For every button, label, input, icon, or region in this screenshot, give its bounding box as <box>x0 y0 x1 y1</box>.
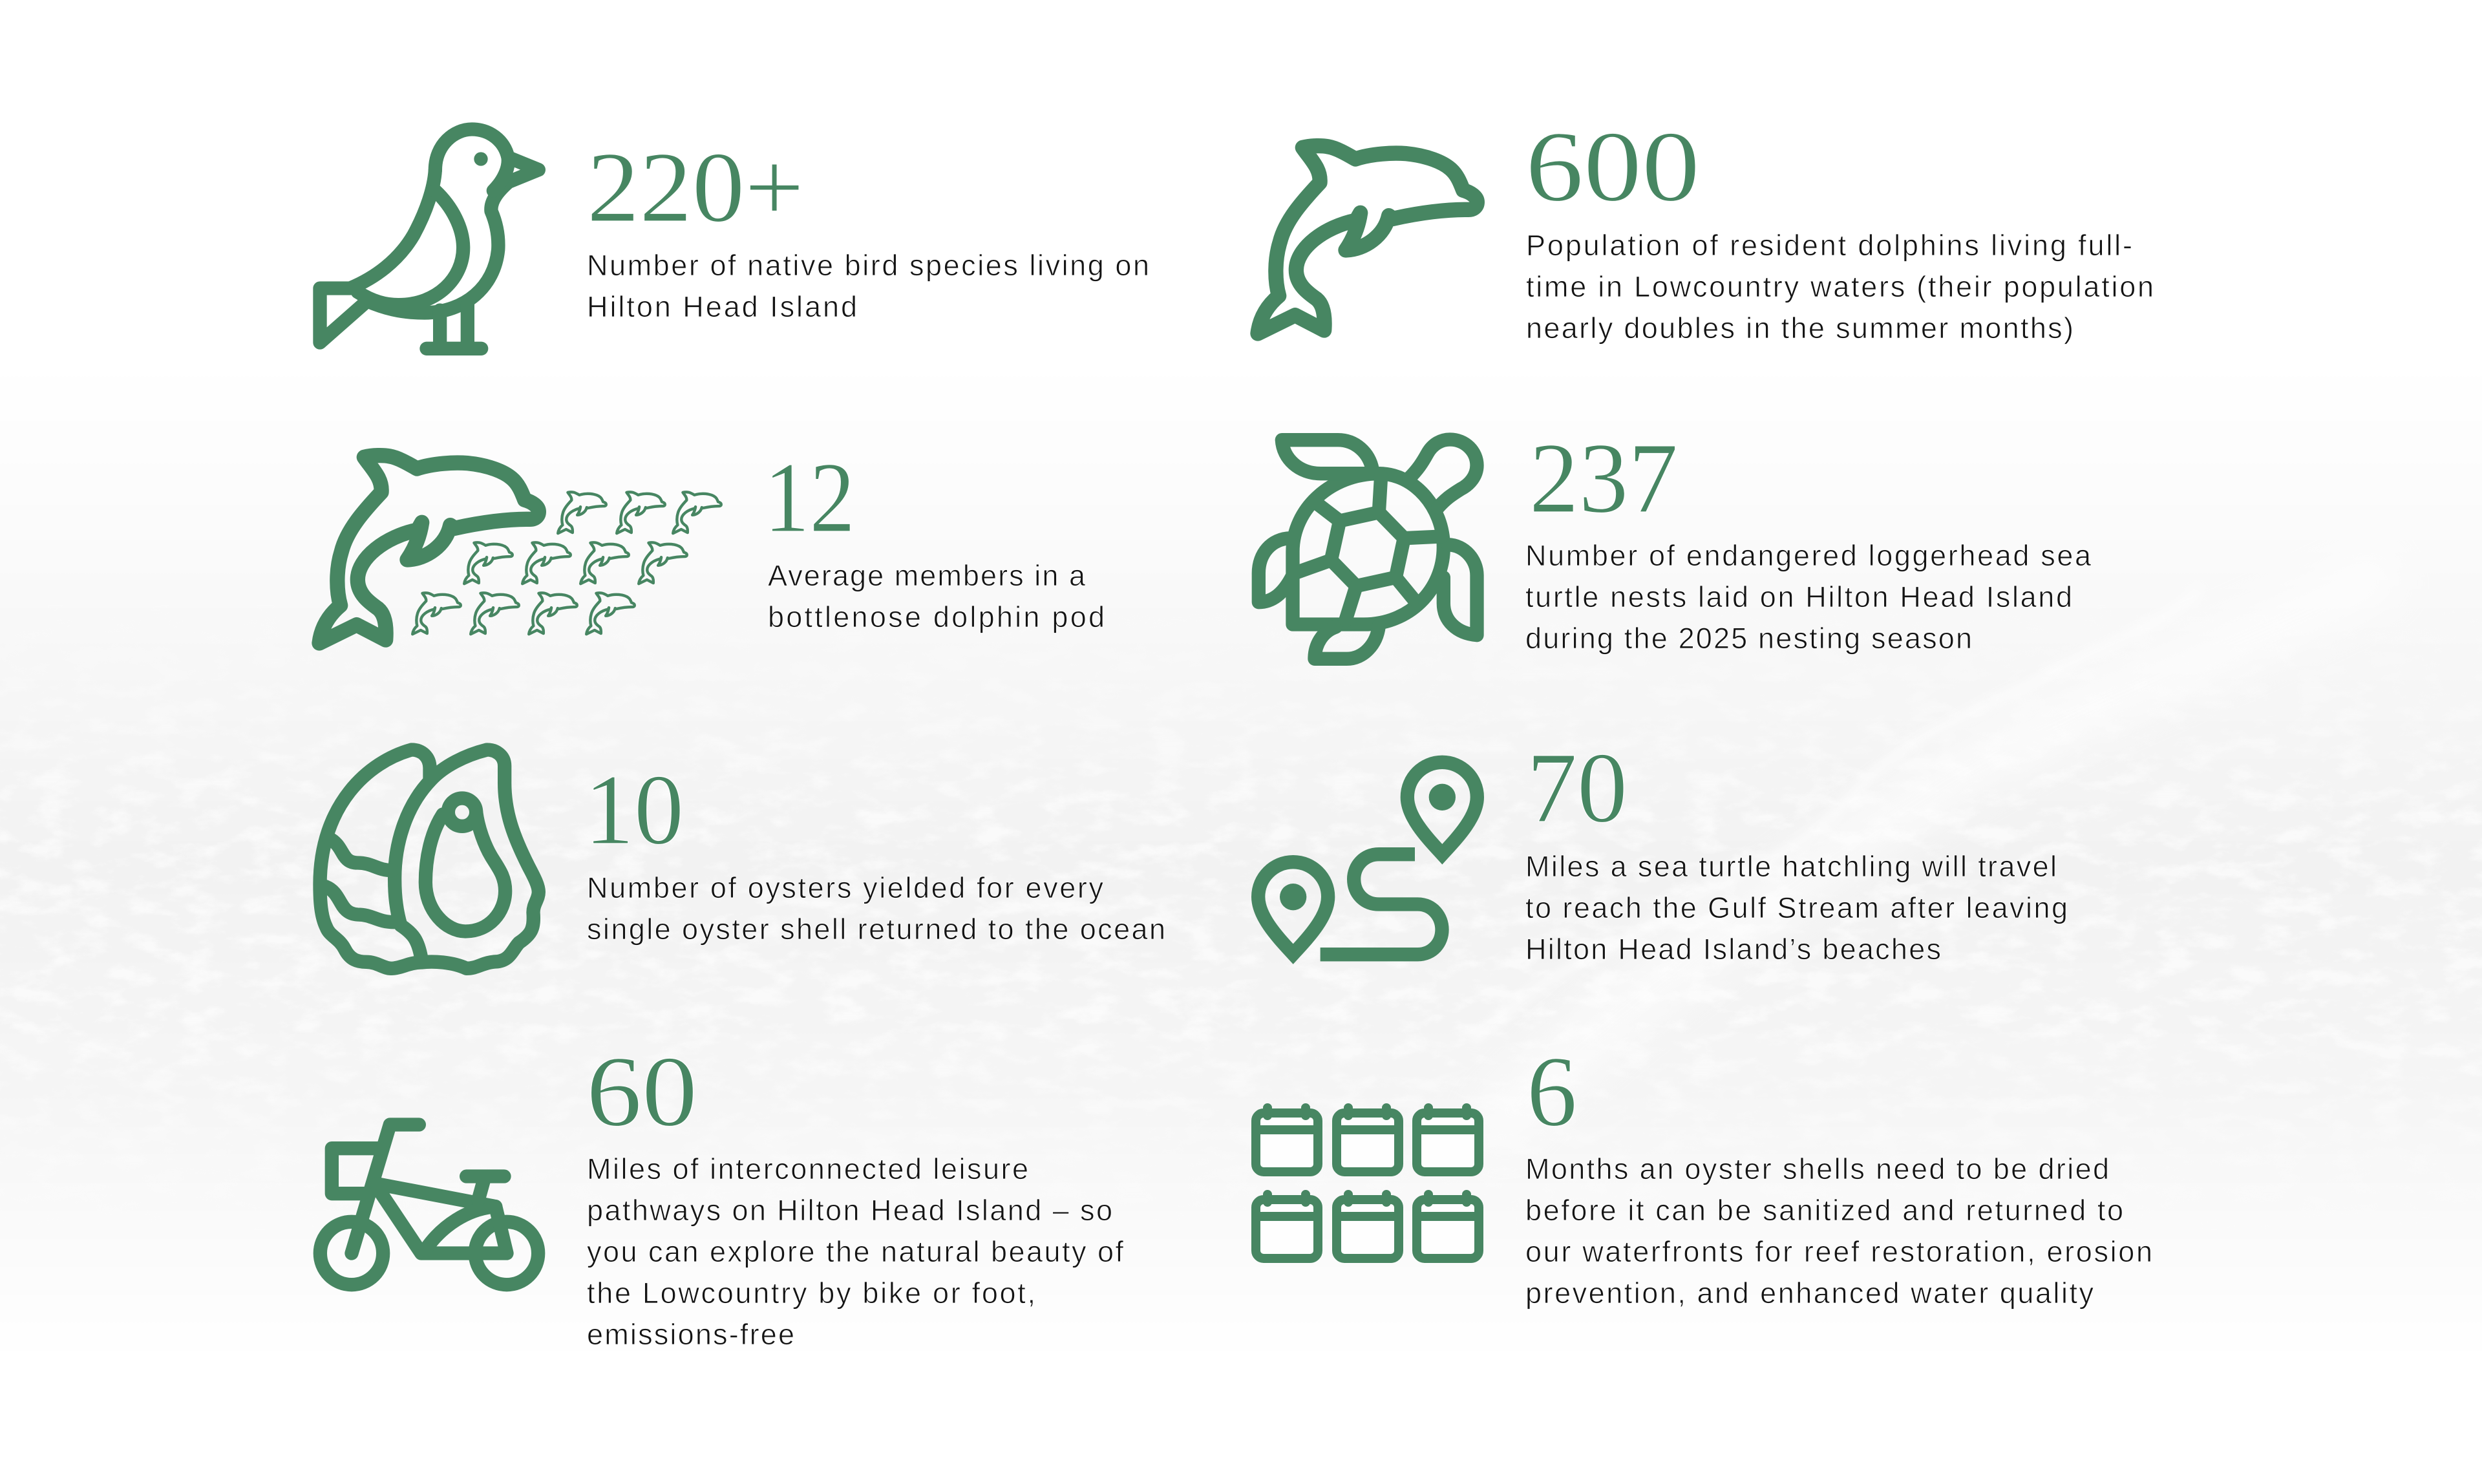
description: dolphin pod: bottlenose dolphin pod <box>768 600 1105 633</box>
description: leisure pathways: you can explore the natural beauty of <box>587 1235 1123 1268</box>
stat: 60 miles of pathways <box>320 1035 1123 1351</box>
description: dolphin pod <box>768 559 1105 633</box>
description: oyster yield: Number of oysters yielded for every <box>587 871 1104 904</box>
description: turtle hatchling journey: Hilton Head Island’s beaches <box>1525 933 1941 966</box>
icon: dolphin <box>1258 146 1477 334</box>
description: resident dolphins: Population of resident dolphins living full- <box>1526 229 2132 262</box>
icon: bicycle <box>320 1125 538 1285</box>
description: oyster shell drying: before it can be sanitized and returned to <box>1525 1194 2123 1227</box>
description: turtle hatchling journey <box>1525 850 2068 966</box>
number: 10: 10 <box>584 754 684 865</box>
description: loggerhead nests: turtle nests laid on Hilton Head Island <box>1525 580 2072 613</box>
description: loggerhead nests: Number of endangered loggerhead sea <box>1525 539 2092 572</box>
stat: 12 dolphins in a pod <box>319 441 1105 643</box>
description: bird species <box>587 249 1149 323</box>
icon: sea turtle <box>1258 440 1477 659</box>
description: bird species: Hilton Head Island <box>587 290 857 323</box>
description: oyster shell drying: Months an oyster shells need to be dried <box>1525 1152 2109 1185</box>
stat: 10 oysters <box>320 750 1165 968</box>
number: 220+: 220+ <box>587 131 804 243</box>
description: resident dolphins: nearly doubles in the summer months) <box>1526 312 2074 344</box>
description: leisure pathways: Miles of interconnected leisure <box>587 1152 1028 1185</box>
background: faint sea photo <box>0 680 2482 1129</box>
icon: oyster <box>320 750 538 968</box>
icon: small dolphin pod <box>412 492 721 634</box>
number: 600: 600 <box>1525 111 1700 222</box>
icon: map route with pins <box>1258 762 1477 955</box>
stat: 6 months shell drying <box>1256 1035 2152 1309</box>
icon: large dolphin <box>319 456 538 643</box>
description: turtle hatchling journey: to reach the Gulf Stream after leaving <box>1525 891 2068 924</box>
description: resident dolphins: time in Lowcountry waters (their population <box>1526 270 2154 303</box>
description: leisure pathways: emissions-free <box>587 1318 794 1351</box>
description: leisure pathways: the Lowcountry by bike or foot, <box>587 1277 1035 1309</box>
number: 70: 70 <box>1527 732 1628 843</box>
number: 237: 237 <box>1529 422 1678 534</box>
stat: 70 miles for hatchlings <box>1258 732 2068 966</box>
description: resident dolphins <box>1526 229 2154 344</box>
description: oyster yield <box>587 871 1165 946</box>
description: oyster yield: single oyster shell returned to the ocean <box>587 913 1165 946</box>
number: 60: 60 <box>586 1035 697 1147</box>
stat: 237 turtle nests <box>1258 422 2092 659</box>
icon: bird <box>320 129 538 348</box>
description: loggerhead nests: during the 2025 nesting season <box>1525 622 1972 655</box>
description: oyster shell drying: prevention, and enhanced water quality <box>1525 1277 2094 1309</box>
number: 12: 12 <box>764 441 855 553</box>
description: leisure pathways: pathways on Hilton Head Island – so <box>587 1194 1112 1227</box>
description: leisure pathways <box>587 1152 1123 1351</box>
description: dolphin pod: Average members in a <box>768 559 1086 592</box>
stat: 220+ native bird species <box>320 129 1149 348</box>
description: turtle hatchling journey: Miles a sea turtle hatchling will travel <box>1525 850 2057 883</box>
icon: six calendars <box>1256 1108 1479 1258</box>
stat: 600 resident dolphins <box>1258 111 2154 344</box>
description: oyster shell drying <box>1525 1152 2152 1309</box>
description: bird species: Number of native bird species living on <box>587 249 1149 282</box>
description: oyster shell drying: our waterfronts for reef restoration, erosion <box>1525 1235 2152 1268</box>
description: loggerhead nests <box>1525 539 2092 655</box>
number: 6: 6 <box>1527 1035 1577 1147</box>
